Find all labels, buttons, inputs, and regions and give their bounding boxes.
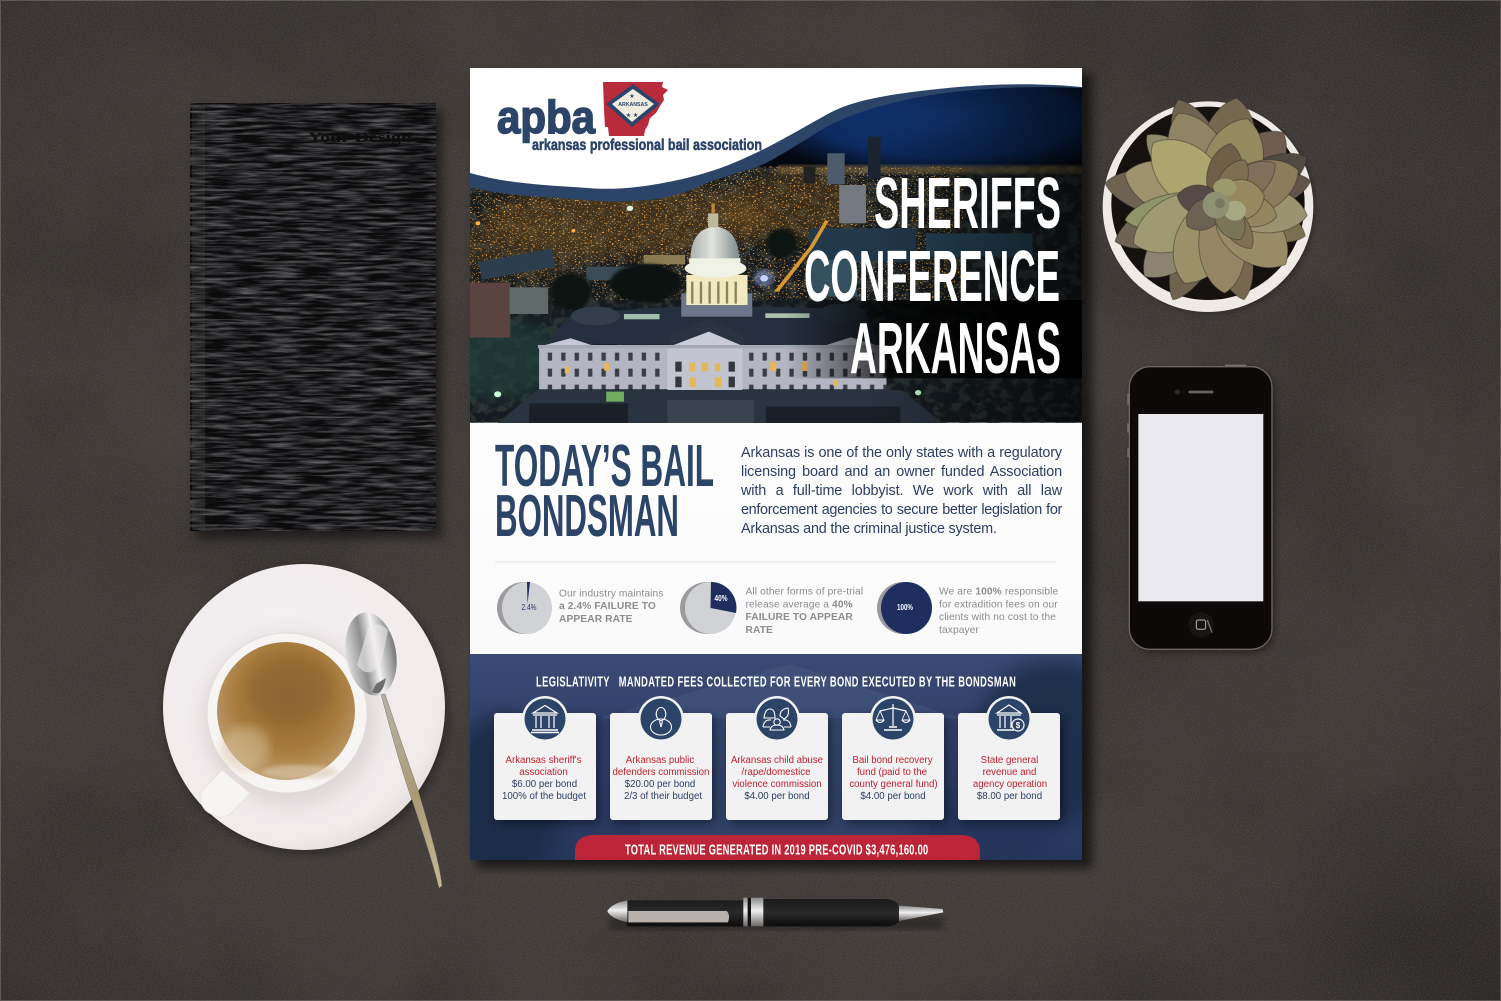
heading: today's bail bondsman: BONDSMAN	[495, 483, 679, 549]
pie chart 100%: 100%	[897, 602, 913, 612]
embossed text: Your Design	[308, 130, 413, 146]
fee card: public defenders	[610, 696, 715, 823]
stat text: for extradition fees on our	[939, 600, 1058, 610]
intro paragraph: licensing board and an owner funded Association	[741, 464, 1062, 480]
screen	[1138, 414, 1263, 601]
white wave header	[470, 68, 1082, 189]
stat text: We are 100% responsible	[939, 586, 1058, 598]
leaves	[1101, 91, 1316, 308]
card text: /rape/domestice	[742, 767, 810, 778]
total revenue banner	[575, 835, 980, 860]
stat text: clients with no cost to the	[939, 612, 1056, 623]
roofs	[545, 307, 881, 347]
stat text: a 2.4% FAILURE TO	[559, 601, 656, 612]
navy wave band	[470, 68, 1082, 202]
coffee cup and saucer	[163, 564, 448, 854]
hero photo of capitol at night	[470, 87, 1082, 423]
main title: CONFERENCE	[804, 237, 1060, 317]
main title: ARKANSAS	[850, 309, 1061, 389]
card text: violence commission	[732, 779, 822, 790]
stat: 100% responsible	[877, 582, 1058, 636]
Arkansas state flag shape: ★ ★	[626, 112, 638, 119]
left buildings	[470, 283, 510, 338]
apba wordmark: apba	[497, 91, 595, 143]
fee card: bail bond recovery	[842, 696, 947, 823]
fee card: state general revenue: $	[1016, 721, 1021, 730]
fee card: state general revenue	[958, 696, 1063, 823]
stat text: release average a 40%	[746, 600, 853, 610]
card text: Arkansas child abuse	[731, 755, 823, 766]
pie chart 100%	[877, 582, 932, 634]
fee card: sheriff's association	[494, 696, 599, 823]
icon: scales of justice	[876, 704, 910, 730]
pie chart 40%: 40%	[714, 593, 728, 603]
card text: defenders commission	[613, 767, 709, 778]
card text: $6.00 per bond	[512, 779, 577, 790]
card text: county general fund)	[849, 779, 938, 790]
card text: agency operation	[973, 779, 1047, 790]
stat text: Our industry maintains	[559, 588, 664, 600]
card text: association	[519, 767, 568, 778]
icon: family	[763, 708, 791, 730]
total revenue banner: TOTAL REVENUE GENERATED IN 2019 PRE-COVID $3,476,160.00	[625, 841, 928, 858]
stat: 40% failure to appear	[680, 582, 863, 636]
fees heading: LEGISLATIVITY MANDATED FEES COLLECTED FOR EVERY BOND EXECUTED BY THE BONDSMAN	[536, 673, 1016, 690]
card text: $20.00 per bond	[625, 779, 695, 790]
heading: today's bail bondsman	[495, 433, 714, 549]
card text: 2/3 of their budget	[624, 791, 702, 802]
card text: Arkansas public	[626, 755, 694, 766]
card text: Arkansas sheriff's	[506, 755, 582, 766]
icon: bank with dollar coin	[997, 705, 1024, 731]
card text: $4.00 per bond	[744, 791, 810, 802]
intro paragraph: enforcement agencies to secure better legislation for	[741, 502, 1062, 518]
intro paragraph: Arkansas is one of the only states with a regulatory	[741, 444, 1062, 460]
trees around capitol	[550, 273, 591, 310]
facade	[539, 347, 887, 389]
poster white page	[470, 68, 1082, 860]
Arkansas state flag shape: ARKANSAS	[618, 102, 648, 108]
main title	[804, 164, 1061, 389]
card text: $4.00 per bond	[860, 791, 926, 802]
notebook	[190, 103, 442, 538]
pen	[607, 898, 943, 930]
card text: revenue and	[983, 767, 1036, 778]
stat text: All other forms of pre-trial	[746, 586, 863, 598]
card text: 100% of the budget	[502, 791, 586, 802]
dark overlays	[878, 87, 1082, 423]
Arkansas state flag shape	[603, 82, 668, 136]
APBA logo	[497, 82, 762, 154]
stat: 2.4% failure to appear	[497, 582, 664, 634]
card text: fund (paid to the	[857, 767, 927, 778]
smartphone	[1127, 365, 1275, 653]
icon: bank building	[531, 706, 559, 732]
stat text: taxpayer	[939, 625, 980, 636]
stat text: FAILURE TO APPEAR	[746, 612, 853, 623]
Arkansas state flag shape: ★	[629, 93, 635, 100]
pie chart 2.4%	[497, 582, 552, 634]
plaza and parking	[498, 390, 944, 423]
poster shadow	[476, 74, 1092, 868]
stat text: RATE	[746, 625, 773, 636]
pie chart 40%	[680, 582, 736, 634]
intro paragraph	[741, 444, 1062, 536]
card text: Bail bond recovery	[852, 755, 933, 766]
association name: arkansas professional bail association	[532, 137, 762, 154]
fees panel	[470, 654, 1082, 860]
main title: SHERIFFS	[874, 164, 1061, 244]
card text: State general	[981, 755, 1038, 766]
heading: today's bail bondsman: TODAY’S BAIL	[495, 433, 714, 499]
fee card: child abuse commission	[726, 696, 831, 823]
spoon	[339, 608, 442, 888]
succulent plant pot	[1101, 91, 1316, 313]
card text: $8.00 per bond	[977, 791, 1042, 802]
poster	[470, 68, 1082, 860]
icon: person	[650, 708, 672, 735]
panel background with faint capitol	[470, 654, 1082, 860]
drum and dome	[681, 293, 752, 317]
stat text: APPEAR RATE	[559, 614, 633, 625]
skyline	[868, 137, 881, 178]
intro paragraph: with a full-time lobbyist. We work with all law	[741, 482, 1062, 498]
pie chart 2.4%: 2.4%	[522, 602, 537, 612]
intro paragraph: Arkansas and the criminal justice system.	[741, 520, 997, 536]
